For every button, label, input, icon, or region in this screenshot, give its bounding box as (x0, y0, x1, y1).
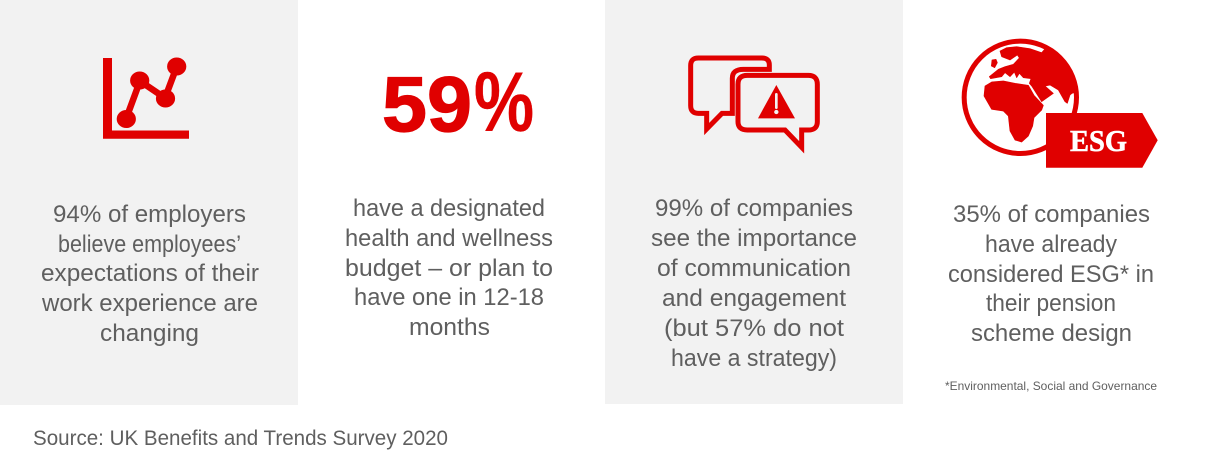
text: 99% of companies: (but 57% do not (664, 315, 844, 342)
footnote: *Environmental, Social and Governance (945, 379, 1157, 393)
text: 99% of companies: and engagement (662, 285, 846, 312)
text: 35% of companies: 35% of companies (953, 201, 1150, 228)
text: 94% of employers (41, 201, 259, 347)
text: 35% of companies: scheme design (971, 320, 1132, 347)
globe (964, 41, 1082, 153)
icon: speech bubbles with warning (691, 58, 817, 147)
text: 94% of employers: work experience are (41, 290, 258, 317)
panel: communication (605, 0, 903, 404)
big number: % (474, 55, 534, 149)
ESG tag (1046, 113, 1158, 168)
text: designated budget: health and wellness (345, 225, 553, 252)
text: 99% of companies: of communication (657, 255, 851, 282)
text: 94% of employers: believe employees’ (58, 231, 241, 258)
text: 35% of companies: have already (985, 231, 1118, 258)
source line: Source: UK Benefits and Trends Survey 2020 (33, 426, 448, 450)
text: designated budget: months (409, 314, 490, 341)
text: 35% of companies: considered ESG* in (948, 261, 1154, 288)
panel: ESG (945, 41, 1158, 393)
text: 94% of employers: changing (100, 320, 199, 347)
big number: 59 (382, 60, 472, 148)
text: designated budget (345, 195, 553, 341)
panel background (0, 0, 298, 405)
text: designated budget: have one in 12-18 (354, 284, 544, 311)
text: designated budget: budget – or plan to (345, 255, 553, 282)
text: 99% of companies: see the importance (651, 225, 857, 252)
panel background (605, 0, 903, 404)
text: 35% of companies: their pension (986, 290, 1116, 317)
text: 94% of employers: expectations of their (41, 260, 259, 287)
text: 99% of companies: have a strategy) (671, 345, 837, 372)
text: 99% of companies: 99% of companies (655, 195, 853, 222)
text: 35% of companies (948, 201, 1154, 347)
icon: line chart (103, 58, 189, 139)
panel: employee expectations (0, 0, 298, 405)
text: 94% of employers: 94% of employers (53, 201, 246, 228)
icon: globe with ESG tag (964, 41, 1158, 168)
panel: wellness budget (345, 55, 553, 341)
text: designated budget: have a designated (353, 195, 545, 222)
ESG tag: ESG (1070, 123, 1127, 158)
text: 99% of companies (651, 195, 857, 372)
